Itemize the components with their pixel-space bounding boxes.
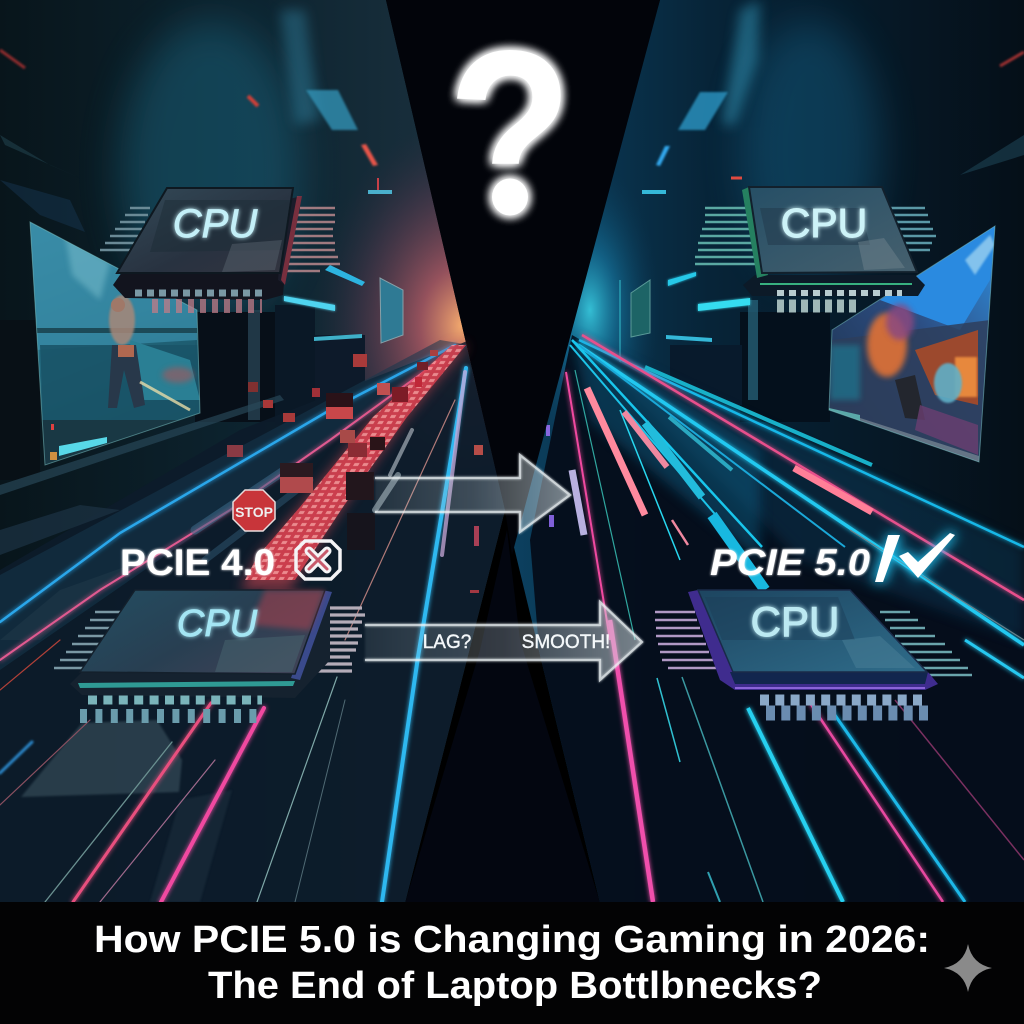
small screen left: [380, 278, 403, 343]
panel: left PCIE 4.0 scene: [0, 0, 505, 902]
stop sign: [233, 490, 275, 531]
panel: centre dark divider with question mark: [386, 0, 660, 903]
bottom pins: [760, 700, 932, 713]
CPU label: CPU: [751, 598, 839, 645]
ceiling red light left: [361, 144, 378, 166]
lower dark wedge: [405, 530, 600, 903]
PCIE 4.0 label: [120, 541, 340, 583]
game screen right: [829, 226, 995, 470]
building towers left: [38, 178, 392, 472]
CPU label: CPU: [173, 202, 258, 246]
building towers right: [620, 272, 830, 422]
ceiling light panel left: [306, 90, 358, 130]
upper arrow: [375, 455, 570, 532]
PCIE 5.0 label: [710, 531, 957, 583]
title bar: [0, 902, 1024, 1024]
CPU chip top left: [100, 188, 340, 306]
road surface left: [0, 340, 505, 903]
congested data packets: [227, 350, 438, 550]
neon road lines left: [0, 345, 466, 902]
title text: How PCIE 5.0 is Changing Gaming in 2026:: [94, 919, 930, 961]
CPU label: CPU: [177, 603, 258, 645]
icon: check mark: [873, 531, 957, 582]
small screen right: [631, 280, 650, 337]
PCIE 5.0 label: PCIE 5.0: [710, 542, 870, 583]
ceiling light panel right: [678, 92, 728, 130]
bottom pins: [777, 293, 902, 306]
arrow label: smooth: SMOOTH!: [522, 632, 610, 653]
stop sign: STOP: [235, 504, 273, 520]
icon: sparkle watermark: [944, 944, 992, 992]
CPU chip bottom right: [655, 590, 972, 713]
CPU chip bottom left: [54, 590, 365, 716]
bottom pins: [135, 293, 262, 306]
bottom pins: [80, 700, 262, 716]
side pins: [100, 208, 340, 271]
game screen left: [30, 222, 200, 470]
question mark: ?: [448, 3, 572, 262]
lower arrow: [365, 602, 642, 680]
red data bottleneck stream: [227, 345, 468, 590]
CPU chip top right: [695, 187, 936, 306]
panel: right PCIE 5.0 scene: [500, 0, 1024, 903]
explosion fire: [867, 313, 907, 377]
neon road lines right: [566, 335, 1024, 902]
road surface right: [530, 335, 933, 902]
PCIE 4.0 label: PCIE 4.0: [120, 542, 275, 583]
arrow label: lag: LAG?: [423, 632, 471, 653]
title bar: The End of Laptop Bottlbnecks?: [208, 965, 822, 1007]
CPU label: CPU: [781, 200, 867, 246]
icon: X in octagon: [296, 541, 340, 579]
game character left: [108, 295, 145, 408]
